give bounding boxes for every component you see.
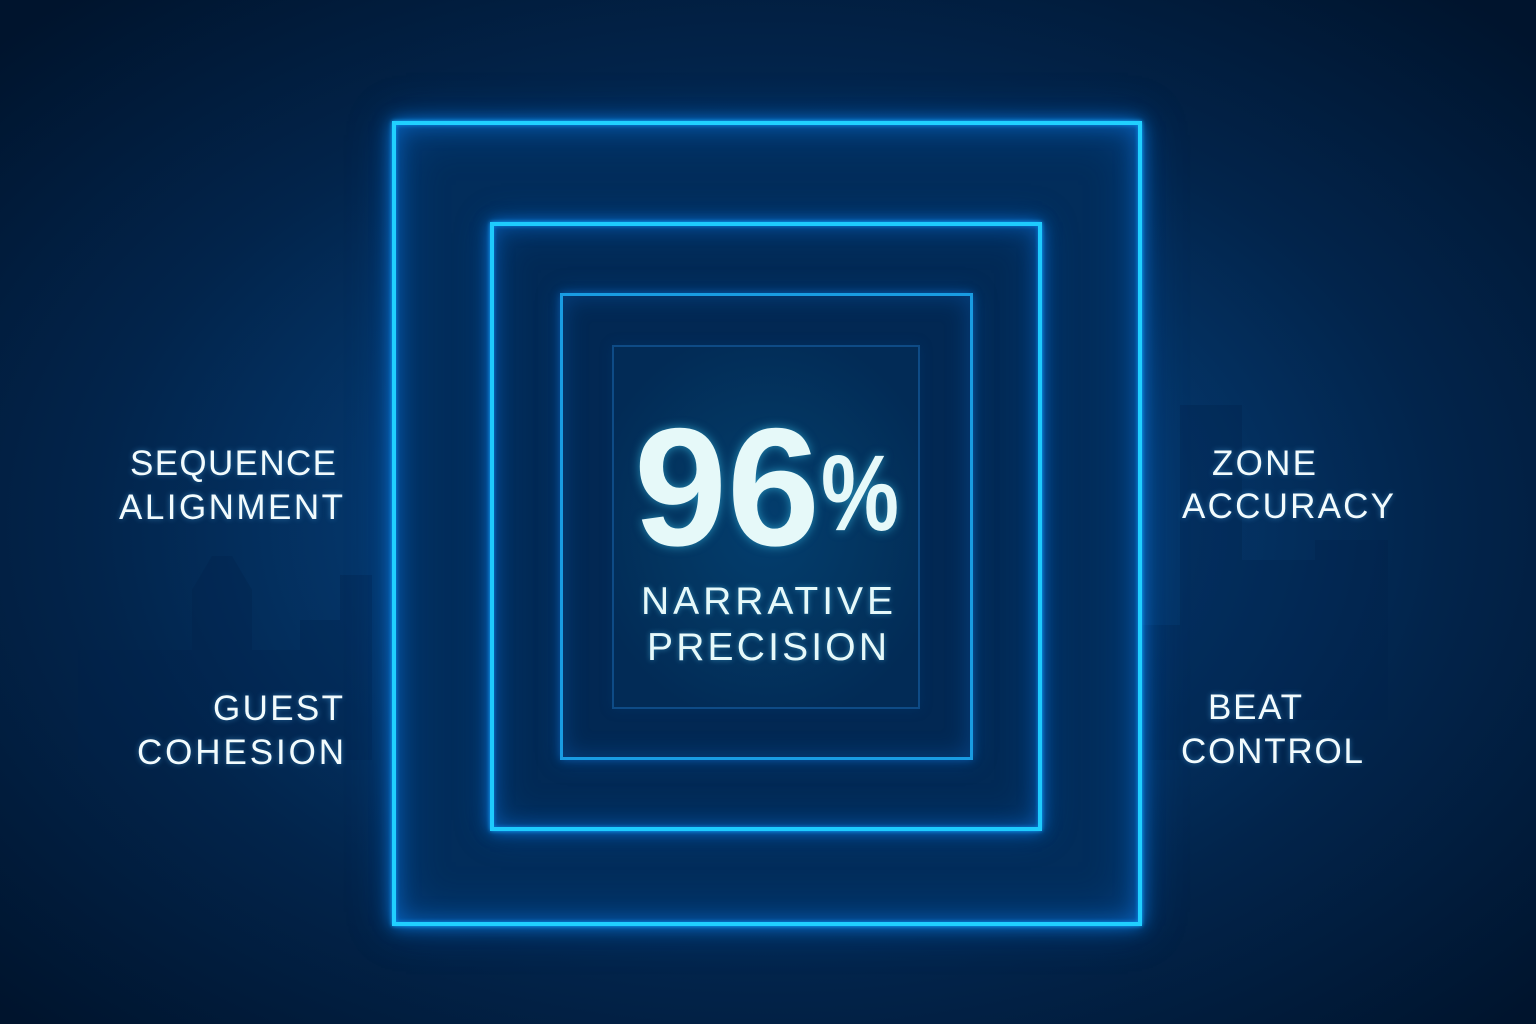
label: guest cohesion: COHESION: [137, 733, 344, 772]
label: sequence alignment: [119, 444, 343, 527]
metric: 96%: %: [821, 432, 899, 553]
caption: narrative precision: [641, 580, 893, 669]
label: zone accuracy: [1182, 444, 1394, 526]
caption: narrative precision: PRECISION: [647, 626, 887, 669]
caption: narrative precision: NARRATIVE: [641, 580, 893, 623]
second neon square: [490, 222, 1042, 831]
label: guest cohesion: GUEST: [213, 689, 343, 728]
outer neon square: [392, 121, 1142, 926]
label: beat control: CONTROL: [1181, 732, 1363, 771]
metric: 96%: 96: [634, 393, 820, 581]
inner square panel: [612, 345, 920, 709]
label: guest cohesion: [137, 689, 344, 772]
label: sequence alignment: ALIGNMENT: [119, 488, 343, 527]
third neon square: [560, 293, 973, 760]
label: sequence alignment: SEQUENCE: [130, 444, 336, 483]
label: zone accuracy: ACCURACY: [1182, 487, 1394, 526]
label: beat control: [1181, 688, 1363, 771]
label: beat control: BEAT: [1208, 688, 1302, 727]
label: zone accuracy: ZONE: [1212, 444, 1316, 483]
